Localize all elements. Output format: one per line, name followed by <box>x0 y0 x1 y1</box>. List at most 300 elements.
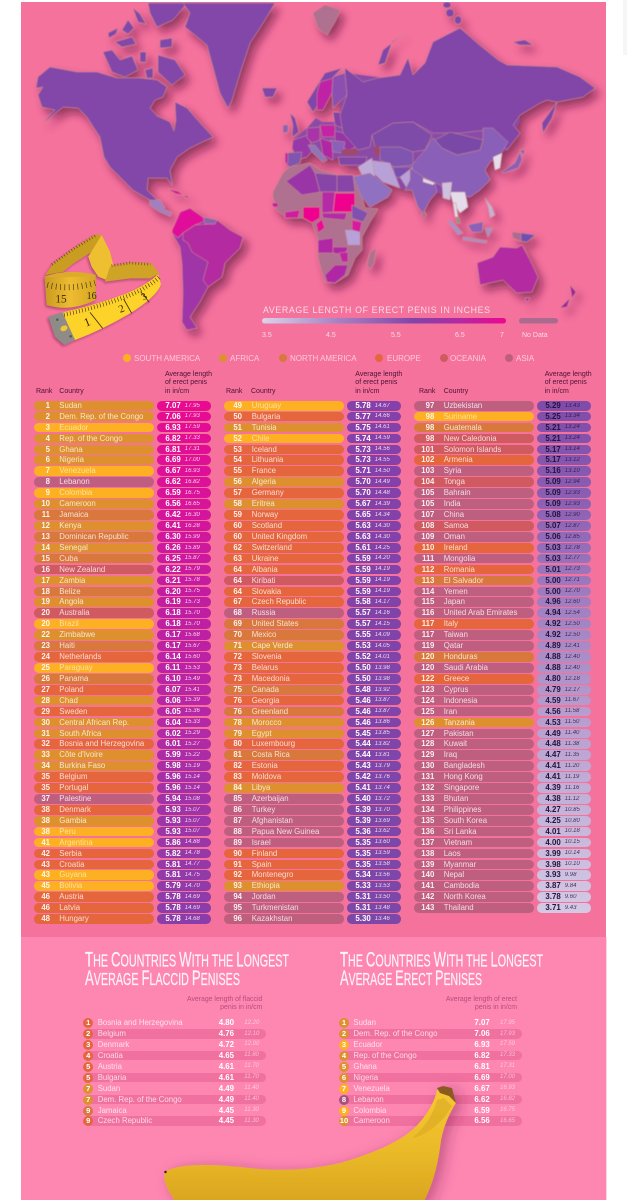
row: 14.20 <box>375 555 390 561</box>
row: Poland <box>59 685 84 694</box>
row: Austria <box>59 892 84 901</box>
row: 14.78 <box>185 850 200 856</box>
row <box>224 761 402 772</box>
row: 133 <box>421 794 434 803</box>
row: 14.19 <box>375 577 390 583</box>
row <box>414 412 592 423</box>
row <box>414 597 592 608</box>
row: 96 <box>233 914 242 923</box>
row: 135 <box>421 816 434 825</box>
row: Tonga <box>444 477 465 486</box>
row: Samoa <box>444 521 468 530</box>
row: Lithuania <box>252 455 283 464</box>
row: Serbia <box>59 849 82 858</box>
title: flaccid list: AVERAGE FLACCID PENISES <box>85 966 240 990</box>
table header: column one value: Average length <box>165 371 212 378</box>
row: 14.34 <box>375 512 390 518</box>
row: Moldova <box>252 772 281 781</box>
list row: 6.93 <box>474 1040 490 1049</box>
row: 3 <box>46 423 50 432</box>
row: Pakistan <box>444 728 474 738</box>
row: 5.03 <box>545 554 561 563</box>
row: 14.66 <box>375 413 390 419</box>
row: 5.93 <box>165 805 181 814</box>
row <box>414 870 592 881</box>
row: 15.53 <box>185 665 200 671</box>
list row: Croatia <box>98 1051 123 1060</box>
list row: Denmark <box>98 1040 129 1049</box>
row <box>414 401 592 412</box>
row: Cambodia <box>444 881 479 890</box>
row <box>414 663 592 674</box>
key dot: oceania <box>440 354 448 362</box>
list row: 11.80 <box>244 1052 259 1058</box>
row: 16.82 <box>185 479 200 485</box>
row: 5.78 <box>165 903 181 912</box>
row: 73 <box>233 663 242 672</box>
row: 7.06 <box>165 412 181 421</box>
row <box>34 576 211 585</box>
grey screenshot sliver <box>623 0 627 55</box>
row: Japan <box>444 597 465 606</box>
row: France <box>252 466 276 475</box>
row: 5.57 <box>355 608 371 617</box>
row: Scotland <box>252 521 282 530</box>
row: 13.72 <box>375 796 390 802</box>
list row: 4.72 <box>219 1040 234 1049</box>
list row: 1 <box>342 1018 346 1027</box>
row: 5.41 <box>355 783 371 792</box>
list row: Rep. of the Congo <box>353 1051 417 1060</box>
row: 5.61 <box>355 543 371 552</box>
row: 35 <box>41 783 50 792</box>
row <box>414 849 592 860</box>
row: 12.50 <box>565 632 580 638</box>
panel: map and ranking background <box>21 2 606 937</box>
row: Croatia <box>59 860 84 869</box>
row: 6.82 <box>165 434 181 443</box>
row: Russia <box>252 608 276 617</box>
row: 78 <box>233 718 242 727</box>
row <box>414 477 592 488</box>
row <box>34 412 211 421</box>
key dot: asia <box>505 354 513 362</box>
row <box>224 488 402 499</box>
list: longest erect <box>339 1018 519 1127</box>
row <box>224 565 402 576</box>
row: 120 <box>421 652 434 661</box>
row: Hong Kong <box>444 772 483 781</box>
row: Egypt <box>252 728 272 738</box>
row: 5.81 <box>165 870 181 879</box>
row: Netherlands <box>59 652 101 661</box>
row: 6.62 <box>165 477 181 486</box>
row: 52 <box>233 434 242 443</box>
erect list column heading: Average length of erect <box>446 996 517 1003</box>
list row <box>339 1018 519 1029</box>
row: Chad <box>59 696 78 705</box>
row <box>414 750 592 761</box>
row <box>224 881 402 892</box>
row: 4.92 <box>545 630 561 639</box>
row: Armenia <box>444 455 473 464</box>
row: 6.56 <box>165 499 181 508</box>
row: 123 <box>421 685 434 694</box>
row: Philippines <box>444 805 481 814</box>
row: Finland <box>252 849 277 858</box>
table header: column two value <box>355 370 402 395</box>
row: 126 <box>421 718 434 727</box>
row: 107 <box>421 510 434 519</box>
row: Bosnia and Herzegovina <box>59 739 144 748</box>
row <box>34 827 212 838</box>
row: 5.59 <box>355 554 371 563</box>
row: 5.52 <box>355 652 371 661</box>
row: 5.48 <box>355 685 371 694</box>
map: black sea <box>341 149 359 155</box>
row: Germany <box>252 488 284 497</box>
row <box>34 466 211 476</box>
row: 11.58 <box>565 708 579 714</box>
list row: 7.06 <box>474 1029 490 1038</box>
row: 13.85 <box>375 730 390 736</box>
row: 5.39 <box>355 805 371 814</box>
row: 134 <box>421 805 434 814</box>
row: 15.07 <box>185 818 200 824</box>
row <box>414 685 592 696</box>
row: Slovakia <box>252 587 281 596</box>
row: 59 <box>233 510 242 519</box>
row: 12.40 <box>565 665 580 671</box>
list row: 3 <box>86 1040 90 1049</box>
legend gradient scale <box>262 318 506 324</box>
ranking column: 97 to 143 <box>414 401 592 914</box>
row <box>34 870 212 881</box>
row: 5.74 <box>355 434 371 443</box>
list row: 9 <box>342 1106 346 1115</box>
row: 14.05 <box>375 643 390 649</box>
row: 5.78 <box>165 892 181 901</box>
row <box>34 794 212 805</box>
row: 41 <box>41 838 50 847</box>
row: 13.79 <box>375 763 390 769</box>
row: Denmark <box>59 805 91 814</box>
row: 5.67 <box>355 499 371 508</box>
row: 14.88 <box>185 839 200 845</box>
row: 5.36 <box>355 827 371 836</box>
row: 110 <box>422 543 434 552</box>
row: 5.94 <box>165 794 181 803</box>
row <box>224 849 402 860</box>
row: 15.14 <box>185 785 200 791</box>
row: 124 <box>421 696 434 705</box>
row <box>414 783 592 794</box>
row: 13.82 <box>375 741 390 747</box>
row: 5.78 <box>355 401 371 410</box>
row: 5.50 <box>355 663 371 672</box>
list row: 12.20 <box>244 1020 259 1026</box>
row: 137 <box>421 838 434 847</box>
row: 14.30 <box>375 534 390 540</box>
row: 42 <box>41 849 50 858</box>
row: 16.28 <box>185 523 200 529</box>
row: 5.21 <box>545 434 561 443</box>
row: 16 <box>41 565 50 574</box>
row <box>34 434 211 443</box>
row <box>224 685 402 696</box>
row: 14.77 <box>185 861 200 867</box>
table header: column two value: of erect penis <box>355 379 397 386</box>
row: Mexico <box>252 630 276 639</box>
metal end of tape <box>48 312 75 345</box>
row <box>224 794 402 805</box>
table header: column three value: of erect penis <box>545 379 587 386</box>
row: 6.30 <box>165 532 181 541</box>
row: Paraguay <box>59 663 93 672</box>
row: 12.93 <box>565 501 580 507</box>
row <box>224 750 402 761</box>
top loop of tape <box>45 234 159 282</box>
row: 4.94 <box>545 608 561 617</box>
row: 4.38 <box>545 794 561 803</box>
row: 14.50 <box>375 468 390 474</box>
row: 38 <box>41 805 50 814</box>
row: Hungary <box>59 914 89 923</box>
row: 6.21 <box>165 576 181 585</box>
row: 6.06 <box>165 696 181 705</box>
row <box>34 652 211 662</box>
row: 5.33 <box>355 881 371 890</box>
row: 5.98 <box>165 761 181 770</box>
row: 5.09 <box>545 477 561 486</box>
row <box>224 903 402 914</box>
row <box>414 587 592 597</box>
row: Czech Republic <box>252 597 306 606</box>
row: 5.09 <box>545 499 561 508</box>
row <box>414 827 592 838</box>
row: 5.50 <box>355 674 371 683</box>
row: Iceland <box>252 445 277 454</box>
list row: 6.69 <box>474 1073 490 1082</box>
row: Qatar <box>444 641 463 650</box>
row: 4.41 <box>545 761 561 770</box>
row: 31 <box>41 728 50 738</box>
row <box>34 685 211 695</box>
row: 7 <box>46 466 50 475</box>
row: 5.55 <box>355 630 371 639</box>
row <box>34 849 212 860</box>
list row <box>339 1116 519 1127</box>
world map <box>35 2 602 348</box>
row: Haiti <box>59 641 75 650</box>
row <box>34 477 211 487</box>
row <box>224 423 402 434</box>
row: 6.10 <box>165 674 181 683</box>
list row <box>83 1029 263 1040</box>
list row: 11.70 <box>244 1074 259 1080</box>
row <box>224 838 402 849</box>
row: 23 <box>41 641 50 650</box>
row: 71 <box>233 641 242 650</box>
row: Eritrea <box>252 499 275 508</box>
row: 13.56 <box>375 872 390 878</box>
map: south america <box>172 208 243 330</box>
row: Cape Verde <box>252 641 293 650</box>
row <box>224 718 402 728</box>
list row: 8 <box>342 1095 346 1104</box>
row: 6.17 <box>165 641 181 650</box>
legend scale labels: 6.5 <box>455 332 465 339</box>
row: Ukraine <box>252 554 279 563</box>
list row: Austria <box>98 1062 122 1071</box>
row: 5.79 <box>165 881 181 890</box>
row: 5.16 <box>545 466 561 475</box>
row: 3.98 <box>545 860 561 869</box>
row: 4.48 <box>545 739 561 748</box>
list row: Bulgaria <box>98 1073 126 1082</box>
row: 5 <box>46 445 50 454</box>
row: Georgia <box>252 696 279 705</box>
row: 10.14 <box>565 850 580 856</box>
row <box>224 455 402 466</box>
row: 131 <box>421 772 434 781</box>
row: 4.41 <box>545 772 561 781</box>
measuring strip: 2 <box>117 303 126 316</box>
row: 17.93 <box>185 413 200 419</box>
list row <box>339 1095 519 1106</box>
row: 98 <box>426 423 434 432</box>
row <box>34 718 211 727</box>
row: 10.15 <box>565 839 580 845</box>
row: 64 <box>233 576 242 585</box>
row: 35 <box>41 772 50 781</box>
row: 6.19 <box>165 597 181 606</box>
row <box>414 455 592 466</box>
row: 16.93 <box>185 468 200 474</box>
map legend <box>262 305 558 339</box>
row: Ecuador <box>59 423 88 432</box>
row: 14 <box>41 543 50 552</box>
row: 13.53 <box>375 883 390 889</box>
row: Sri Lanka <box>444 827 477 836</box>
table header: column one rank: Rank <box>36 388 52 395</box>
map: africa <box>272 163 378 283</box>
row: 43 <box>41 870 50 879</box>
row <box>414 466 592 477</box>
row: 5.59 <box>355 587 371 596</box>
row: Canada <box>252 685 279 694</box>
row: 11.38 <box>565 741 579 747</box>
row <box>34 597 211 607</box>
row <box>224 434 402 445</box>
row: 4.80 <box>545 674 561 683</box>
row: 5.00 <box>545 576 561 585</box>
row: Indonesia <box>444 696 478 705</box>
row: Estonia <box>252 761 278 770</box>
row: 15.33 <box>185 719 200 725</box>
row: 119 <box>422 641 434 650</box>
row: Gambia <box>59 816 87 825</box>
row: Burkina Faso <box>59 761 105 770</box>
flaccid list column heading: Average length of flaccid <box>187 996 262 1003</box>
row: Zambia <box>59 576 85 585</box>
legend scale labels: 5.5 <box>391 332 401 339</box>
row <box>34 619 211 629</box>
row: Thailand <box>444 903 474 912</box>
map: europe <box>262 68 360 167</box>
row: 24 <box>41 652 50 661</box>
row: Palestine <box>59 794 91 803</box>
row: 48 <box>41 914 50 923</box>
row <box>414 794 592 805</box>
row <box>34 750 211 760</box>
row: 136 <box>421 827 434 836</box>
table header: column two rank: Rank <box>226 388 242 395</box>
row: 56 <box>233 477 242 486</box>
row <box>34 608 211 618</box>
row: 82 <box>233 761 242 770</box>
list row: 12.10 <box>244 1031 259 1037</box>
row <box>414 728 592 739</box>
row: 15.99 <box>185 534 200 540</box>
map: australia and new zealand <box>477 245 576 308</box>
list row <box>339 1040 519 1051</box>
row: 14.39 <box>375 501 390 507</box>
row: 5.39 <box>355 816 371 825</box>
list row: Ghana <box>353 1062 377 1071</box>
list row: 5 <box>86 1073 90 1082</box>
row: 13.34 <box>565 413 580 419</box>
row: 16.65 <box>185 501 200 507</box>
row: Latvia <box>59 903 80 912</box>
row: Cameroon <box>59 499 96 508</box>
row: 102 <box>421 455 434 464</box>
list row: 4.76 <box>219 1029 234 1038</box>
row: 57 <box>233 488 242 497</box>
row: Greenland <box>252 707 288 716</box>
row: 5.34 <box>355 870 371 879</box>
row: Afghanistan <box>252 816 293 825</box>
row <box>414 707 592 718</box>
list row: 4 <box>342 1051 346 1060</box>
row: 15.07 <box>185 807 200 813</box>
row: Albania <box>252 565 278 574</box>
row: 15.68 <box>185 632 200 638</box>
row: 92 <box>233 870 242 879</box>
row <box>34 401 211 411</box>
row <box>34 881 212 892</box>
row: Cyprus <box>444 685 468 694</box>
row: 12.77 <box>565 555 580 561</box>
row <box>34 423 211 432</box>
row: 87 <box>233 816 242 825</box>
row: 111 <box>422 554 434 563</box>
row: 5.35 <box>355 849 371 858</box>
row: 127 <box>421 728 434 738</box>
row: 80 <box>233 739 242 748</box>
list row: Dem. Rep. of the Congo <box>353 1029 437 1038</box>
row <box>224 674 402 685</box>
row: 105 <box>421 499 434 508</box>
key dot: south america <box>123 354 131 362</box>
row: 38 <box>41 816 50 825</box>
row: 15.41 <box>185 686 200 692</box>
row: 6.18 <box>165 619 181 628</box>
row: Nepal <box>444 870 464 879</box>
key label: north america: NORTH AMERICA <box>290 354 357 362</box>
row: 12.40 <box>565 654 580 660</box>
map: eurasia land base <box>293 70 520 213</box>
